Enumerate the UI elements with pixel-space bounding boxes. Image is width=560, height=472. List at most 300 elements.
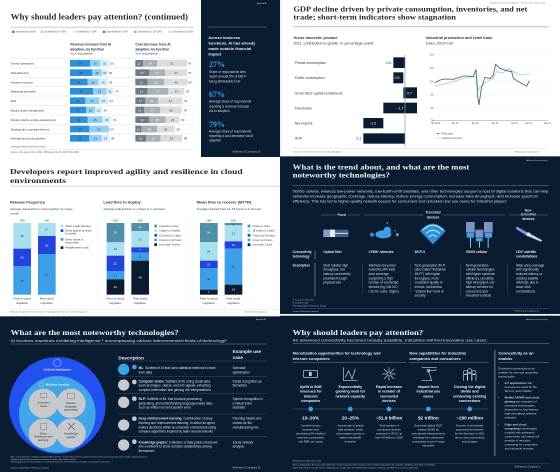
intro text: networks increase geographic coverage, reduce latency, reduce energy consumption, increase data throughput, and increase spectrum xyxy=(293,194,538,198)
chart: release frequency: Prior to cloud xyxy=(13,297,31,301)
row: computer vision: such as images, videos, and 3-D signals, extracting xyxy=(139,384,211,388)
enabler column text: enabler for new and upcoming xyxy=(498,370,538,374)
chart: lead time to deploy: 11 xyxy=(138,255,142,259)
column headings: Revenue increase from AI xyxy=(70,42,111,46)
table: function bars: 74 xyxy=(115,90,119,94)
bar chart: contribution to growth: Gross domestic product xyxy=(293,36,338,40)
row: ML: ML: Subfield of AI that uses statistical methods to learn xyxy=(139,366,216,370)
column headings: Monetization opportunities for technology and xyxy=(293,351,381,356)
chart: mean time to recover: migration xyxy=(227,301,240,305)
descriptions: with significantly xyxy=(516,268,539,272)
title: GDP decline driven by private consumption, inventories, and net xyxy=(293,4,528,13)
side panel: notable financial impact: McKinsey & Company 26 xyxy=(233,150,261,153)
row labels and technologies: LEO² satellite xyxy=(516,250,536,254)
chart: mean time to recover: 21 xyxy=(232,232,235,236)
metrics column: uplift: telecom xyxy=(304,394,318,398)
descriptions: cellular technologies xyxy=(466,268,495,272)
table: function bars: 37 xyxy=(174,71,178,75)
descriptions: efficiency, providing xyxy=(466,276,494,280)
row: NLP: NLP: Subfield of ML that involves processing, xyxy=(139,397,203,401)
line chart: industrial production and retail trade: 110 xyxy=(430,68,434,70)
side panel: notable financial impact: 67% xyxy=(209,90,225,99)
metric values xyxy=(302,416,483,421)
metrics column: uplift: enhancing existing xyxy=(453,394,486,398)
row: ML: optimization xyxy=(233,370,250,374)
chart: lead time to deploy: 22 xyxy=(114,285,117,289)
table: function bars: 27 xyxy=(175,90,178,94)
chart: mean time to recover: 3 xyxy=(232,223,234,227)
table: function bars: 15 xyxy=(101,80,105,84)
side panel: notable financial impact: made notable financial xyxy=(208,46,251,51)
side panel: notable financial impact: being attributable to AI xyxy=(209,79,241,83)
row labels and technologies: technology xyxy=(293,254,310,258)
descriptions: area coverage xyxy=(369,272,389,276)
chart: release frequency: 100 xyxy=(20,218,25,222)
intro text xyxy=(293,190,548,203)
line chart: industrial production and retail trade: Industrial production xyxy=(441,137,463,140)
row: knowledge graphs xyxy=(118,439,254,453)
table: function bars: 76 xyxy=(184,137,188,141)
table headings xyxy=(118,349,262,361)
bar chart: contribution to growth: -0.6 xyxy=(385,61,391,65)
table: function bars: 35 xyxy=(156,90,160,94)
icon: LEO satellite xyxy=(516,226,542,242)
bar chart: contribution to growth xyxy=(293,36,417,147)
intro text: 5G/6G cellular, wireless low-power networks, low-Earth-orbit satellites, and other technologies support a host of digital solutions that can help xyxy=(293,190,548,194)
descriptions: throughput, more xyxy=(415,276,439,280)
metrics column: uplift: Impact from xyxy=(418,385,440,389)
table: function bars: Supply chain management xyxy=(11,108,44,112)
row: deep reinforcement learning: complex algorithms inspired by brain neural networks xyxy=(139,430,213,434)
side panel: notable financial impact: Across business xyxy=(208,35,241,40)
icon: Wi-Fi 6 xyxy=(420,224,446,244)
column headings: New capabilities for industrial xyxy=(409,351,466,356)
row: computer vision: biometrics xyxy=(233,384,247,388)
side panel: notable financial impact: Share of respondents who xyxy=(209,70,246,74)
table: function bars: 26 xyxy=(76,99,80,103)
enabler column text: • xyxy=(498,381,499,385)
chart: release frequency: every week xyxy=(65,240,79,244)
table: function bars: Manufacturing xyxy=(11,71,29,75)
chart: release frequency: Every quarter to every xyxy=(65,229,92,233)
panel: most noteworthy technologies xyxy=(0,316,280,472)
table: function bars: 78 xyxy=(183,108,187,112)
table: function bars: 11 xyxy=(137,127,140,131)
metrics column: uplift xyxy=(300,385,486,403)
chart: lead time to deploy: 26 xyxy=(114,231,117,235)
line chart: industrial production and retail trade: 100 xyxy=(430,81,434,83)
metrics column: uplift: connected xyxy=(380,394,398,398)
side panel: notable financial impact: Average share of respondents xyxy=(209,100,252,104)
diagram: nested AI fields: graphs xyxy=(67,435,76,439)
chart: lead time to deploy: 11 xyxy=(114,273,117,277)
metric descriptions: necessitates access to xyxy=(336,432,365,436)
metrics column: uplift: in number of xyxy=(378,390,401,394)
chart: lead time to deploy: Prior to cloud xyxy=(107,297,124,301)
descriptions: security xyxy=(415,294,426,298)
descriptions: physical wire xyxy=(323,281,342,285)
metric descriptions: and B2B use cases xyxy=(298,440,323,444)
icon: LPWA cloud xyxy=(370,222,399,238)
icons xyxy=(304,367,476,381)
chart: mean time to recover: 11 xyxy=(232,243,235,247)
table: function bars: 32 xyxy=(97,127,101,131)
chart: lead time to deploy: 100 xyxy=(138,218,143,222)
side panel: notable financial impact: reporting a revenue increase xyxy=(209,104,249,108)
chart: mean time to recover: 30 xyxy=(207,277,211,281)
table: function bars: 65 xyxy=(111,62,114,66)
table: function bars: 79 xyxy=(184,99,188,103)
bar chart: contribution to growth: Public consumption xyxy=(295,76,325,80)
row: deep reinforcement learning: motion for the xyxy=(233,421,252,425)
chart: mean time to recover: migration xyxy=(203,301,215,305)
enabler column text: benefits of next-gen xyxy=(505,439,531,443)
row labels and technologies: LPWA¹ networks xyxy=(369,250,394,254)
side panel: notable financial impact: report at least 5% of EBIT¹ xyxy=(209,75,246,79)
title: Developers report improved agility and resilience in cloud xyxy=(10,167,243,176)
enabler column text: increase the need for 5G, xyxy=(505,385,538,389)
metrics column: uplift: devices xyxy=(382,399,396,403)
table: function bars: 87 xyxy=(188,71,192,75)
table: function bars: Average across all activities xyxy=(11,137,46,141)
descriptions: Wide area coverage xyxy=(516,263,544,267)
descriptions: industrial verticals xyxy=(466,294,492,298)
side panel: notable financial impact: reporting a cost decrease via AI xyxy=(209,134,253,138)
metric descriptions: premium connectivity xyxy=(297,436,325,440)
table: function bars: 33 xyxy=(170,137,173,141)
category bracket: terrestrial xyxy=(521,213,536,217)
table: function bars: 13 xyxy=(137,62,141,66)
line chart: industrial production and retail trade: Index, 2019=100 xyxy=(426,41,453,45)
row: knowledge graphs: into a network to show complex relationships among xyxy=(139,445,212,449)
metrics column: uplift: revenues for xyxy=(300,390,322,394)
chart: mean time to recover: 2 days or more xyxy=(252,224,271,228)
table headings: Example use xyxy=(233,349,262,354)
row: knowledge graphs: Social network xyxy=(233,440,254,444)
footnote: include all aspects of perceiving, reasoning, learning, and problem solving. xyxy=(11,458,77,461)
chart: release frequency: Multiple times a day xyxy=(65,246,89,250)
table: function bars: 67 xyxy=(111,127,115,131)
metrics column: uplift: companies xyxy=(301,399,320,403)
metric descriptions: resulting from advanced xyxy=(413,436,444,440)
category bracket xyxy=(321,209,549,221)
enabler column text: gaming are examples of xyxy=(505,400,537,404)
descriptions: latency services for xyxy=(466,285,493,289)
diagram: nested AI fields: language xyxy=(65,404,77,408)
diagram: nested AI fields xyxy=(9,357,106,454)
table: function bars: 63 xyxy=(109,80,113,84)
chart: release frequency: 25 xyxy=(20,256,24,260)
column headings: companies and consumers xyxy=(409,356,461,361)
row labels and technologies: Connectivity xyxy=(293,250,312,254)
metric descriptions: data creation, which xyxy=(338,428,363,432)
side panel: notable financial impact: impact xyxy=(208,51,222,56)
descriptions: supporting a high xyxy=(369,276,393,280)
bar chart: contribution to growth: −1.7 xyxy=(397,106,404,110)
descriptions xyxy=(323,263,544,298)
icon: optical fiber xyxy=(323,230,348,237)
footnote xyxy=(11,145,79,154)
descriptions: networks with wide xyxy=(369,268,395,272)
diagram: nested AI fields: Computer xyxy=(37,400,50,404)
footnote: Source: McKinsey analysis xyxy=(293,310,318,313)
table: function bars: 23 xyxy=(171,118,174,122)
enabler column text: Enhanced connectivity is an xyxy=(498,366,535,370)
row: ML: from data xyxy=(139,370,152,374)
table: function bars: 18 xyxy=(139,137,143,141)
table: function bars: 40 xyxy=(174,80,178,84)
row labels and technologies: 5G/6G cellular xyxy=(466,250,488,254)
row labels and technologies: Wi-Fi 6 xyxy=(415,250,425,254)
table: function bars: 26 xyxy=(148,127,151,131)
enabler column text: Mobile AR/VR¹ and cloud xyxy=(505,396,540,400)
descriptions: Wireless low-power xyxy=(369,263,396,267)
bar chart: contribution to growth: GDP xyxy=(295,137,303,141)
row: deep reinforcement learning: Planning robotic arm xyxy=(233,417,262,421)
metric descriptions xyxy=(296,424,485,448)
metrics column: uplift: divide and xyxy=(461,390,479,394)
table: function bars: 11 xyxy=(109,90,112,94)
title: environments xyxy=(10,176,66,185)
footnote xyxy=(11,455,261,469)
metric values: $2 trillion xyxy=(418,416,439,421)
panel: most noteworthy technologies: Applied AI xyxy=(256,318,266,321)
table: function bars: 58 xyxy=(177,127,180,131)
metric descriptions: operational enhancements xyxy=(412,432,446,436)
title xyxy=(293,162,470,180)
table: function bars: 25 xyxy=(152,137,155,141)
footnote: Source: Digitalization Forecast, 2020–2025, IDC; "Connecting talent: 5G innovation in the workplace beyond the 5G revolution," McKinsey, Feb 2020, Oct-Fi Nokia; xyxy=(293,464,436,467)
side panel: notable financial impact: functions, AI has already xyxy=(208,40,256,45)
table: function bars: 83 xyxy=(186,90,190,94)
table: function bars: 54 xyxy=(104,108,107,112)
chart: lead time to deploy: 100 xyxy=(113,218,118,222)
chart: mean time to recover: Post cloud xyxy=(226,297,241,301)
table: function bars: 39 xyxy=(80,90,83,94)
bar chart: contribution to growth: Inventories xyxy=(295,106,312,110)
diagram: nested AI fields: Reinforcement xyxy=(34,435,53,439)
row labels and technologies: Optical fiber xyxy=(323,250,343,254)
descriptions: Most reliable high xyxy=(323,263,348,267)
metric descriptions: from 43 billion in 2020 xyxy=(375,436,403,440)
table: function bars: 28 xyxy=(154,80,158,84)
bar chart: contribution to growth: -1.0 xyxy=(370,122,376,126)
metrics column: uplift: cases xyxy=(423,394,433,398)
chart: lead time to deploy: 11 xyxy=(138,225,142,229)
table: function bars: 27 xyxy=(76,108,80,112)
table: function bars: 89 xyxy=(188,80,192,84)
row: deep reinforcement learning: Deep reinforcement learning: Combination of deep xyxy=(139,417,213,421)
footnote: McKinsey & Company 11 xyxy=(515,467,541,469)
descriptions: existing satellite xyxy=(516,276,539,280)
side panel: notable financial impact: via AI adoption xyxy=(209,109,230,113)
category bracket: wireless xyxy=(521,217,535,221)
title: What is the trend about, and what are the most xyxy=(293,162,470,171)
row: NLP: a virtual voice xyxy=(233,401,252,405)
footnote: Source: The state of AI in 2021, McKinsey, Dec 8, 2021 (N=1,843) xyxy=(11,151,79,154)
bar chart: contribution to growth: -2.1 xyxy=(355,137,361,141)
enabler column text: coupled with advanced xyxy=(505,431,535,435)
diagram: nested AI fields: Knowledge xyxy=(64,431,78,435)
chart: release frequency xyxy=(10,199,92,305)
legend: Increase by ≥20% xyxy=(16,31,37,34)
enabler column text: networks xyxy=(505,416,517,420)
bar chart: contribution to growth: 0.7 xyxy=(407,91,412,95)
table: function bars: 25 xyxy=(93,118,97,122)
table: function bars: 30 xyxy=(77,118,81,122)
subtitle: As advanced connectivity becomes broadly available, industries will find innovative use cases xyxy=(293,337,487,342)
icon: cellular towers xyxy=(466,222,493,248)
table: function bars: 51 xyxy=(170,62,174,66)
chart: release frequency: migration xyxy=(41,301,53,305)
descriptions: provided through xyxy=(323,276,347,280)
table: function bars: 64 xyxy=(110,99,113,103)
intro text: efficiency. This has led to higher-quality network access for consumers and unlocked new use cases for industrial players xyxy=(293,199,507,203)
footnote: Digital 2021, Global Overview Report, DataReportal, Jan 30, 2021; The World Global Database of Climate and Web Forecast, 2021–2025, IDC xyxy=(293,467,419,470)
footnote xyxy=(293,299,540,313)
column headings: adoption, by function xyxy=(70,47,104,51)
table: function bars: 18 xyxy=(91,80,95,84)
metric values: ~200 million xyxy=(456,416,483,421)
diagram: nested AI fields: Machine learning xyxy=(46,383,69,387)
table: function bars: 15 xyxy=(89,108,92,112)
table: function bars: Risk xyxy=(11,99,17,103)
metric descriptions: Overall revenue xyxy=(301,424,321,428)
descriptions: lower orbit xyxy=(516,285,531,289)
legend xyxy=(12,31,194,34)
line chart: industrial production and retail trade: 70 xyxy=(431,120,434,122)
metric descriptions: Total number of xyxy=(379,424,399,428)
table: function bars: 10 xyxy=(103,71,107,75)
enabler column text xyxy=(498,366,540,451)
row: NLP: Speech recognition in xyxy=(233,397,263,401)
category bracket: Fixed xyxy=(338,213,346,217)
title: noteworthy technologies? xyxy=(293,171,390,180)
chart: mean time to recover: Prior to cloud xyxy=(200,297,218,301)
line chart: industrial production and retail trade xyxy=(426,36,552,140)
table: function bars: 70 xyxy=(113,118,117,122)
line chart: industrial production and retail trade: Jan 20 xyxy=(471,123,479,125)
chart: mean time to recover: 100 xyxy=(231,218,236,222)
enabler column text: Wi-Fi 6, and LPWAN xyxy=(505,389,532,393)
chart: lead time to deploy: 19 xyxy=(114,247,117,251)
footnote: McKinsey & Company xyxy=(245,312,267,314)
chart: lead time to deploy: 12 hours to 2 days xyxy=(159,233,182,237)
enabler column text: high-throughput wireless xyxy=(505,412,537,416)
metrics column: uplift: industrial use xyxy=(416,390,440,394)
table: function bars: 41 xyxy=(169,99,172,103)
panel: why leaders pay attention, connectivity xyxy=(280,316,560,472)
table headings: Description xyxy=(118,356,144,361)
metric descriptions: networks xyxy=(345,440,357,444)
table: function bars: 87 xyxy=(188,62,192,66)
row: deep reinforcement learning: learning and reinforcement learning, in which an agent xyxy=(139,421,215,425)
descriptions: (also called "Industrial xyxy=(415,268,446,272)
enabler column text: connectivity, will unlock full xyxy=(505,435,540,439)
table: function bars: 17 xyxy=(139,99,142,103)
table: function bars: 67 xyxy=(111,137,115,141)
table: function bars: 28 xyxy=(156,118,159,122)
bar chart: contribution to growth: Private consumption xyxy=(295,61,326,65)
line chart: industrial production and retail trade: Jan 23 xyxy=(525,123,533,125)
table: function bars: 33 xyxy=(78,137,82,141)
chart: mean time to recover: Average reduced from 13–18 hours to 4–6 hours xyxy=(197,207,261,211)
metric descriptions: developing 5G-enabled xyxy=(296,432,326,436)
table: function bars: 33 xyxy=(78,127,82,131)
descriptions: consumers and xyxy=(466,289,488,293)
enabler column text: computing technologies, xyxy=(505,427,538,431)
chart: release frequency: 17 xyxy=(45,228,49,232)
enabler column text: technologies xyxy=(498,374,515,378)
column headings: enabler xyxy=(498,356,513,361)
metrics column: uplift: growing need for xyxy=(336,390,366,394)
column headings: Cost decrease from AI xyxy=(135,42,171,46)
source: McKinsey & Company 31 xyxy=(515,151,540,153)
metric descriptions: connected devices xyxy=(377,428,401,432)
descriptions: Next-generation Wi-Fi xyxy=(415,263,446,267)
chart: release frequency: 35 xyxy=(20,234,24,238)
table: function bars: 22 xyxy=(150,99,154,103)
metric descriptions: connectivity in just 4 major xyxy=(412,440,445,444)
panel: why leaders pay attention, connectivity: Advanced connectivity xyxy=(526,318,548,321)
column headings xyxy=(70,42,171,55)
chart: release frequency: 57 xyxy=(45,273,49,277)
metric descriptions: technologies xyxy=(462,440,478,444)
chart: release frequency: Release frequency xyxy=(10,199,46,204)
column headings: telecom companies xyxy=(293,356,330,361)
chart: lead time to deploy: 22 xyxy=(114,261,117,265)
descriptions: reduced latency vs xyxy=(516,272,543,276)
enabler column text: dependent on low-latency, xyxy=(505,408,539,412)
chart: mean time to recover: 26 xyxy=(207,249,211,253)
title xyxy=(10,167,243,185)
legend: Increase by <10% xyxy=(77,31,97,34)
panel: why leaders pay attention, AI financial impact xyxy=(11,0,280,157)
table: function bars: 22 xyxy=(140,118,144,122)
diagram: nested AI fields: learning xyxy=(38,438,49,442)
metric values: 10–20% xyxy=(302,416,320,421)
chart: lead time to deploy: migration xyxy=(109,301,122,305)
descriptions: number of connected xyxy=(369,281,399,285)
chart: lead time to deploy: Post cloud xyxy=(133,297,147,301)
diagram: nested AI fields: Deep xyxy=(40,431,47,435)
line chart: industrial production and retail trade: 120 xyxy=(430,55,434,57)
table headings: case xyxy=(233,355,243,360)
source xyxy=(293,150,540,153)
diagram: nested AI fields: Natural xyxy=(66,401,76,405)
chart: lead time to deploy: migration xyxy=(134,301,146,305)
table: function bars: 12 xyxy=(97,108,100,112)
enabler column text: computing for consumers xyxy=(505,443,538,447)
row: ML: Schedule xyxy=(233,366,246,370)
footnote xyxy=(293,460,541,470)
enabler column text: • xyxy=(498,396,499,400)
side panel: notable financial impact: 79% xyxy=(209,120,225,129)
chart: release frequency: 6 months xyxy=(65,232,77,236)
table: function bars: 63 xyxy=(109,71,113,75)
table: function bars: 13 xyxy=(104,137,107,141)
category bracket: wireless xyxy=(426,215,439,219)
row: deep reinforcement learning xyxy=(118,416,262,434)
metrics column: uplift: Closing the digital xyxy=(454,385,486,389)
metric descriptions: accessing the internet xyxy=(456,428,484,432)
footnote: ²Technologies in this trend include, but not limited to the set of the frontiers of innovation and business evolutions. xyxy=(11,461,111,464)
chart: mean time to recover: 1 hour to 6 hours xyxy=(252,238,273,242)
chart: lead time to deploy: Lead time to deploy xyxy=(103,199,142,204)
table: function bars xyxy=(11,58,194,142)
row: knowledge graphs: themselves xyxy=(139,449,155,453)
line chart: industrial production and retail trade: Jan 24 xyxy=(544,123,552,125)
